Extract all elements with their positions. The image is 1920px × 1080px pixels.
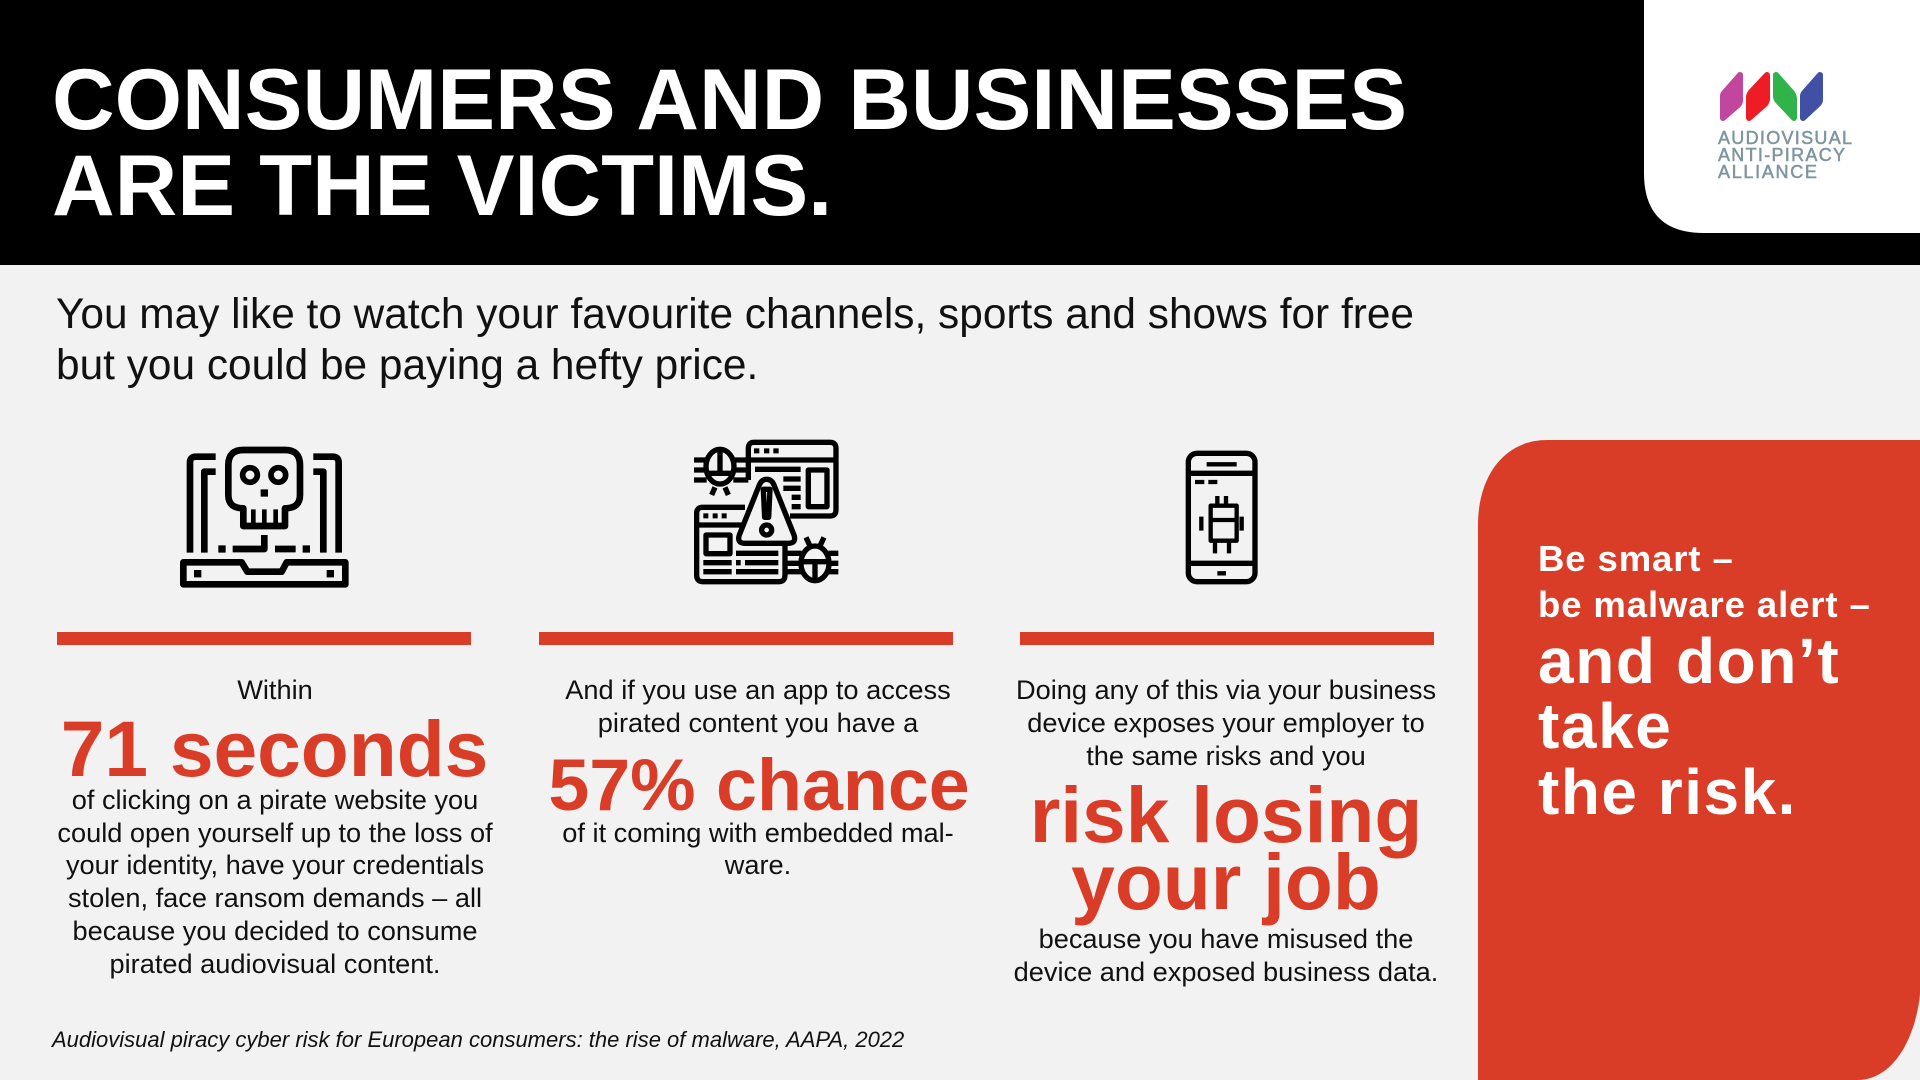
column 3: risk losing your job: [1014, 674, 1438, 987]
icon: malware warning windows: [694, 442, 838, 582]
red divider bars: [57, 632, 1434, 645]
source note: Audiovisual piracy cyber risk for European consumers: the rise of malware, AAPA, 2022: [50, 1027, 904, 1052]
column 3: risk losing your job: because you have misused the: [1039, 923, 1413, 954]
callout text: [1538, 538, 1871, 828]
column 2: 57% chance: [548, 674, 970, 880]
callout text: be malware alert –: [1538, 584, 1871, 625]
icon: phone with android: [1188, 453, 1255, 582]
column 2: 57% chance: ware.: [724, 849, 791, 880]
column 2: 57% chance: of it coming with embedded mal-: [562, 817, 954, 848]
column 2: 57% chance: pirated content you have a: [598, 707, 919, 738]
logo mark: [1723, 75, 1820, 118]
header band: [0, 0, 1920, 265]
column 1: 71 seconds: of clicking on a pirate website you: [72, 784, 478, 815]
logo panel: [1644, 0, 1920, 233]
column 3: risk losing your job: risk losing: [1030, 771, 1422, 859]
title: [52, 52, 1407, 234]
column 1: 71 seconds: stolen, face ransom demands – all: [68, 882, 482, 913]
title: ARE THE VICTIMS.: [52, 138, 832, 234]
intro text: but you could be paying a hefty price.: [56, 341, 758, 388]
icon: laptop with skull: [183, 450, 345, 584]
column 1: 71 seconds: Within: [237, 674, 313, 705]
logo wordmark: ANTI-PIRACY: [1718, 145, 1846, 165]
intro text: You may like to watch your favourite channels, sports and shows for free: [56, 290, 1414, 337]
callout text: take: [1538, 690, 1672, 762]
column 3: risk losing your job: your job: [1071, 838, 1381, 926]
column 2: 57% chance: 57% chance: [548, 743, 970, 826]
callout text: Be smart –: [1538, 538, 1734, 579]
column 1: 71 seconds: because you decided to consume: [72, 915, 478, 946]
column 1: 71 seconds: [57, 674, 493, 979]
intro text: [56, 290, 1414, 388]
callout panel: [1478, 440, 1920, 1080]
logo wordmark: ALLIANCE: [1718, 162, 1819, 182]
column 3: risk losing your job: Doing any of this via your business: [1016, 674, 1436, 705]
column 1: 71 seconds: pirated audiovisual content.: [109, 948, 441, 979]
logo wordmark: AUDIOVISUAL: [1718, 128, 1853, 148]
column 1: 71 seconds: 71 seconds: [61, 705, 488, 793]
logo wordmark: [1718, 128, 1853, 182]
title: CONSUMERS AND BUSINESSES: [52, 52, 1407, 148]
callout text: the risk.: [1538, 756, 1797, 828]
column 1: 71 seconds: could open yourself up to the loss of: [57, 817, 493, 848]
column 3: risk losing your job: the same risks and you: [1086, 740, 1366, 771]
column 1: 71 seconds: your identity, have your credentials: [66, 849, 484, 880]
column 3: risk losing your job: device exposes your employer to: [1027, 707, 1425, 738]
column 2: 57% chance: And if you use an app to access: [565, 674, 951, 705]
column 3: risk losing your job: device and exposed business data.: [1014, 956, 1438, 987]
callout text: and don’t: [1538, 625, 1840, 697]
